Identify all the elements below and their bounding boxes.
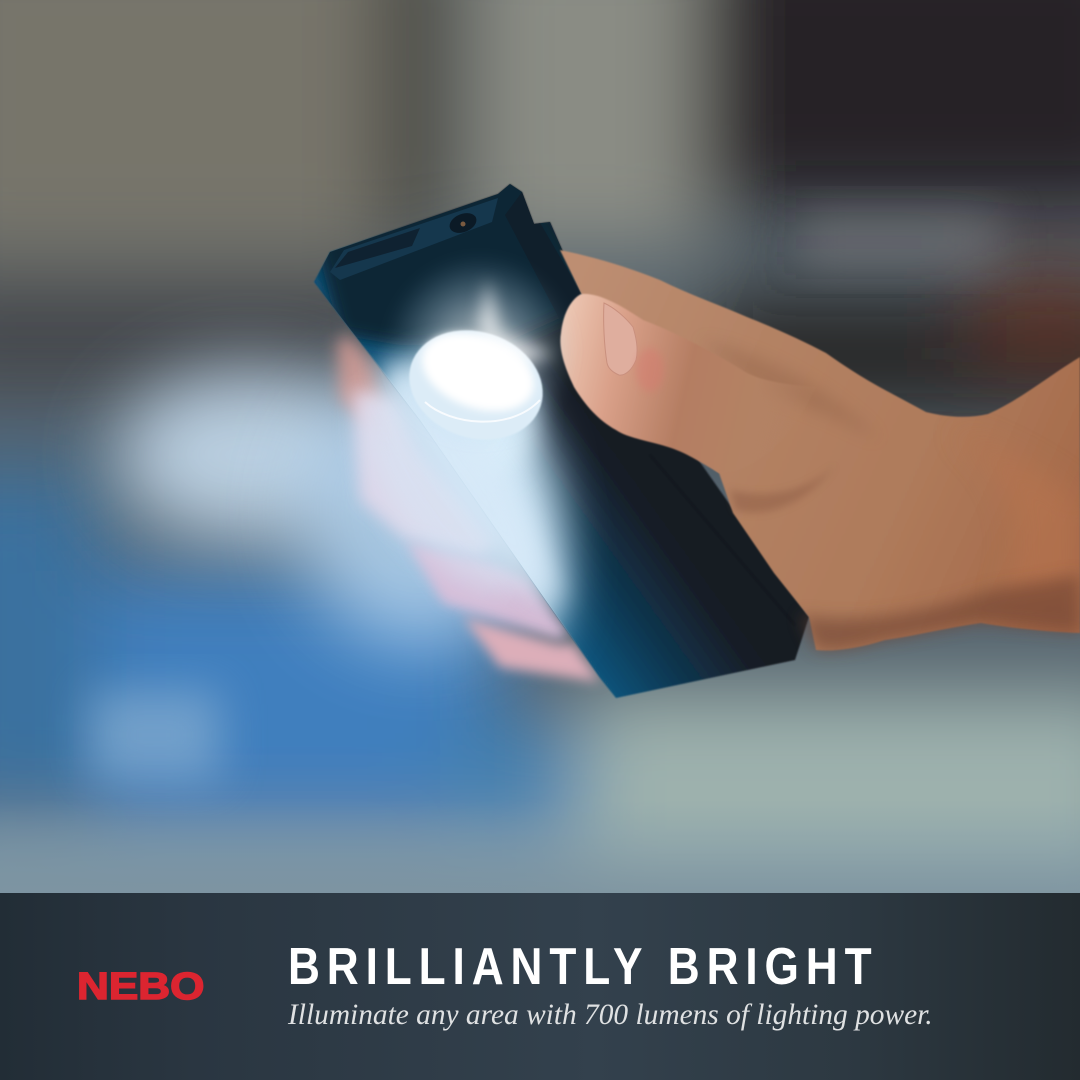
logo: NEBO: NEBO — [77, 966, 204, 1008]
lens and glare — [385, 255, 575, 456]
hand and thumb — [560, 250, 1080, 651]
subheading: Illuminate any area with 700 lumens of lighting power. — [288, 999, 933, 1031]
work light body — [300, 170, 809, 698]
beam wash over light edge and fingers — [331, 343, 576, 620]
caption band — [0, 893, 1080, 1080]
light beam haze — [295, 375, 545, 645]
fingers behind the light — [337, 336, 600, 682]
heading: BRILLIANTLY BRIGHT — [288, 938, 878, 996]
